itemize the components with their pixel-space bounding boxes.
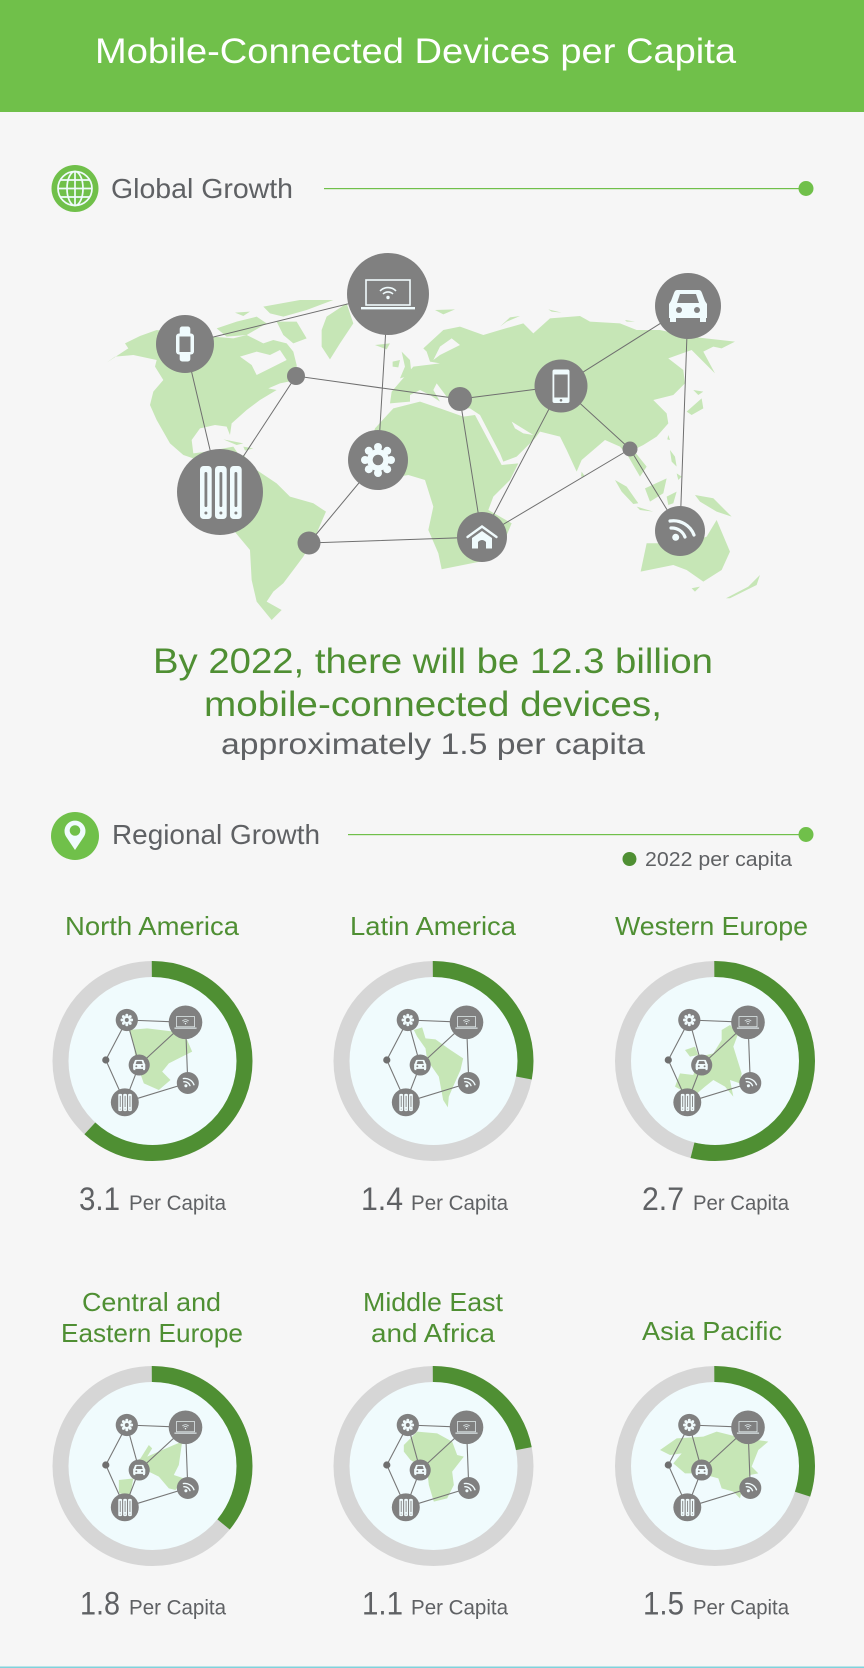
panel: North America — [60, 911, 244, 1217]
icon: gear — [348, 430, 408, 490]
world network map — [107, 253, 760, 620]
title banner: Mobile-Connected Devices per Capita — [95, 32, 737, 71]
title banner — [0, 0, 864, 112]
section header: Regional Growth — [51, 812, 814, 860]
panel: North America: 3.1 — [79, 1181, 120, 1217]
panel: Middle East and Africa — [342, 1287, 526, 1622]
world map: Eurasia, Africa and Oceania — [367, 309, 760, 598]
panel: Asia Pacific: Per Capita — [693, 1596, 789, 1620]
panel: Latin America: 1.4 — [361, 1181, 403, 1217]
icon: car — [655, 273, 721, 339]
panel: Central and Eastern Europe: 1.8 — [80, 1586, 120, 1622]
icon: smartphone — [534, 360, 588, 412]
legend: 2022 per capita — [645, 849, 793, 871]
panel: Asia Pacific: 1.5 — [643, 1586, 684, 1622]
panel: North America: North America — [65, 911, 240, 941]
panel: Central and Eastern Europe: Eastern Europe — [61, 1318, 243, 1348]
headline statement: By 2022, there will be 12.3 billion — [153, 642, 713, 681]
panel: Central and Eastern Europe — [60, 1287, 244, 1622]
icon: smartwatch — [156, 315, 214, 373]
section header: Global Growth — [52, 165, 814, 212]
panel: Middle East and Africa: Per Capita — [411, 1596, 508, 1620]
panel: Western Europe — [615, 911, 808, 1217]
headline statement — [153, 642, 713, 761]
panel: Central and Eastern Europe: Per Capita — [129, 1596, 226, 1620]
panel: Middle East and Africa: and Africa — [371, 1318, 496, 1348]
section header: Regional Growth: Regional Growth — [112, 819, 320, 850]
panel: North America: Per Capita — [129, 1192, 226, 1215]
small node dots — [287, 367, 638, 554]
headline statement: mobile-connected devices, — [204, 685, 662, 724]
panel: Western Europe: Western Europe — [615, 911, 808, 941]
panel: Asia Pacific: Asia Pacific — [642, 1316, 782, 1346]
panel: Latin America: Per Capita — [411, 1192, 508, 1215]
panel: Central and Eastern Europe: Central and — [82, 1287, 221, 1317]
panel: Latin America — [342, 911, 526, 1217]
headline statement: approximately 1.5 per capita — [221, 728, 645, 761]
connection lines — [185, 294, 688, 543]
panel: Middle East and Africa: 1.1 — [362, 1586, 403, 1622]
panel: Middle East and Africa: Middle East — [363, 1287, 504, 1317]
bottom rule — [0, 1666, 864, 1668]
icon: server — [177, 449, 263, 535]
icon: home — [457, 512, 507, 562]
world map: Americas and Greenland — [107, 300, 412, 620]
icon: wifi — [655, 506, 705, 556]
panel: Latin America: Latin America — [350, 911, 517, 941]
panel: Western Europe: Per Capita — [693, 1192, 789, 1215]
panel: Western Europe: 2.7 — [642, 1181, 684, 1217]
section header: Global Growth: Global Growth — [111, 173, 293, 204]
icon: laptop — [347, 253, 429, 335]
panel: Asia Pacific — [623, 1316, 807, 1622]
